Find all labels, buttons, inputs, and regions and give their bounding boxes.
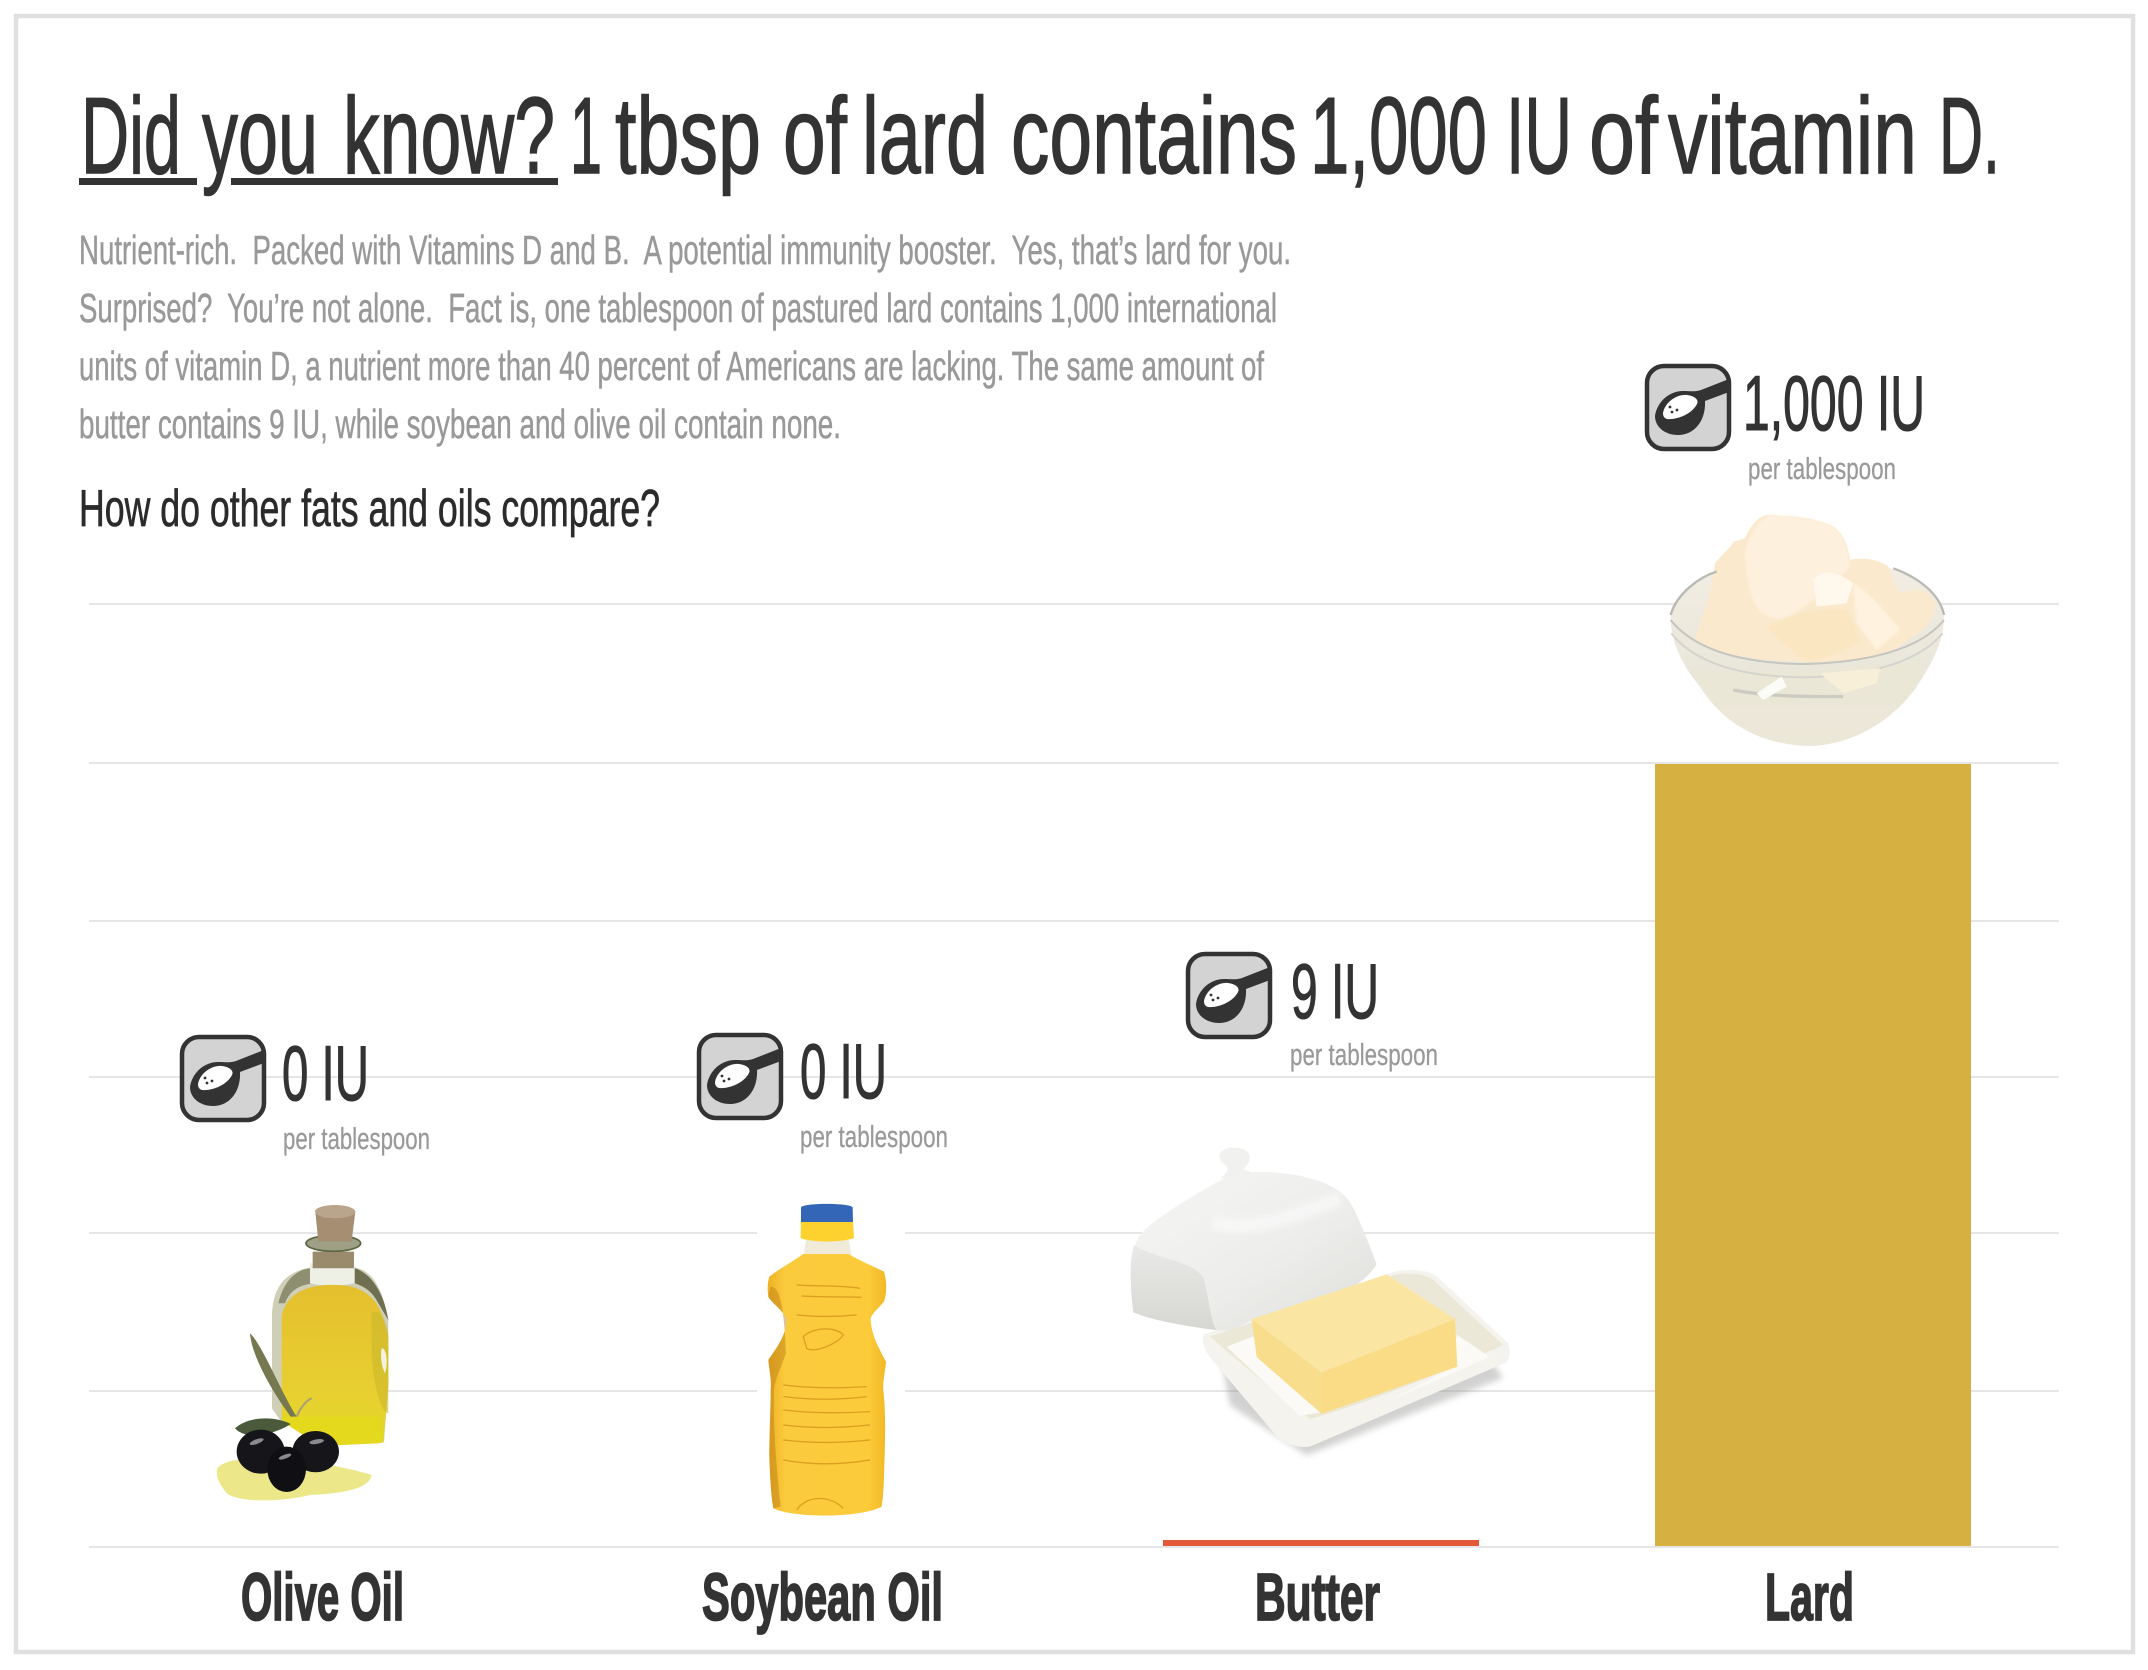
unit: soybean oil: per tablespoon <box>800 1119 948 1154</box>
illustration: butter dish <box>1131 1148 1510 1455</box>
label: soybean oil: Soybean Oil <box>702 1560 943 1635</box>
title: Did <box>81 75 181 197</box>
text block: intro paragraph: Surprised? You’re not alone. Fact is, one tablespoon of pastured lard contains 1,000 international <box>79 285 1277 331</box>
title: D. <box>1939 75 2000 197</box>
title <box>79 75 2000 197</box>
illustration: bowl of lard <box>1671 515 1944 746</box>
unit: olive oil: per tablespoon <box>283 1121 430 1156</box>
value: soybean oil: 0 IU <box>800 1027 887 1115</box>
value: olive oil: 0 IU <box>282 1029 369 1117</box>
title: vitamin <box>1668 75 1917 197</box>
text block: intro paragraph: butter contains 9 IU, while soybean and olive oil contain none. <box>79 401 841 447</box>
title: know? <box>343 75 555 197</box>
title: of <box>1589 75 1659 197</box>
illustration: olive oil bottle with olives <box>217 1205 388 1500</box>
title: tbsp <box>615 75 761 197</box>
label: olive oil: Olive Oil <box>241 1560 404 1635</box>
title: contains <box>1011 75 1297 197</box>
title: 1 <box>570 75 602 197</box>
value: butter: 9 IU <box>1291 947 1379 1035</box>
icon: spoon, olive oil <box>182 1037 264 1120</box>
label: butter: Butter <box>1255 1560 1380 1635</box>
icon: spoon, lard <box>1647 366 1729 449</box>
text block: intro paragraph: Nutrient-rich. Packed with Vitamins D and B. A potential immunity booster. Yes, that’s lard for you. <box>79 227 1291 273</box>
value: lard: 1,000 IU <box>1743 359 1925 447</box>
label: lard: Lard <box>1765 1560 1854 1635</box>
bar: lard <box>1655 764 1971 1546</box>
icon: spoon, butter <box>1188 954 1270 1037</box>
heading: compare: How do other fats and oils compare? <box>79 480 660 538</box>
unit: lard: per tablespoon <box>1748 451 1896 486</box>
illustration: soybean oil bottle <box>757 1193 905 1527</box>
title: lard <box>862 75 988 197</box>
text block: intro paragraph: units of vitamin D, a nutrient more than 40 percent of Americans are lacking. The same amount of <box>79 343 1264 389</box>
unit: butter: per tablespoon <box>1290 1037 1438 1072</box>
title: you <box>202 75 318 197</box>
title: of <box>783 75 848 197</box>
bar: butter <box>1163 1540 1479 1546</box>
title: IU <box>1506 75 1572 197</box>
title: 1,000 <box>1310 75 1487 197</box>
text block: intro paragraph <box>79 227 1291 447</box>
icon: spoon, soybean oil <box>699 1035 781 1118</box>
